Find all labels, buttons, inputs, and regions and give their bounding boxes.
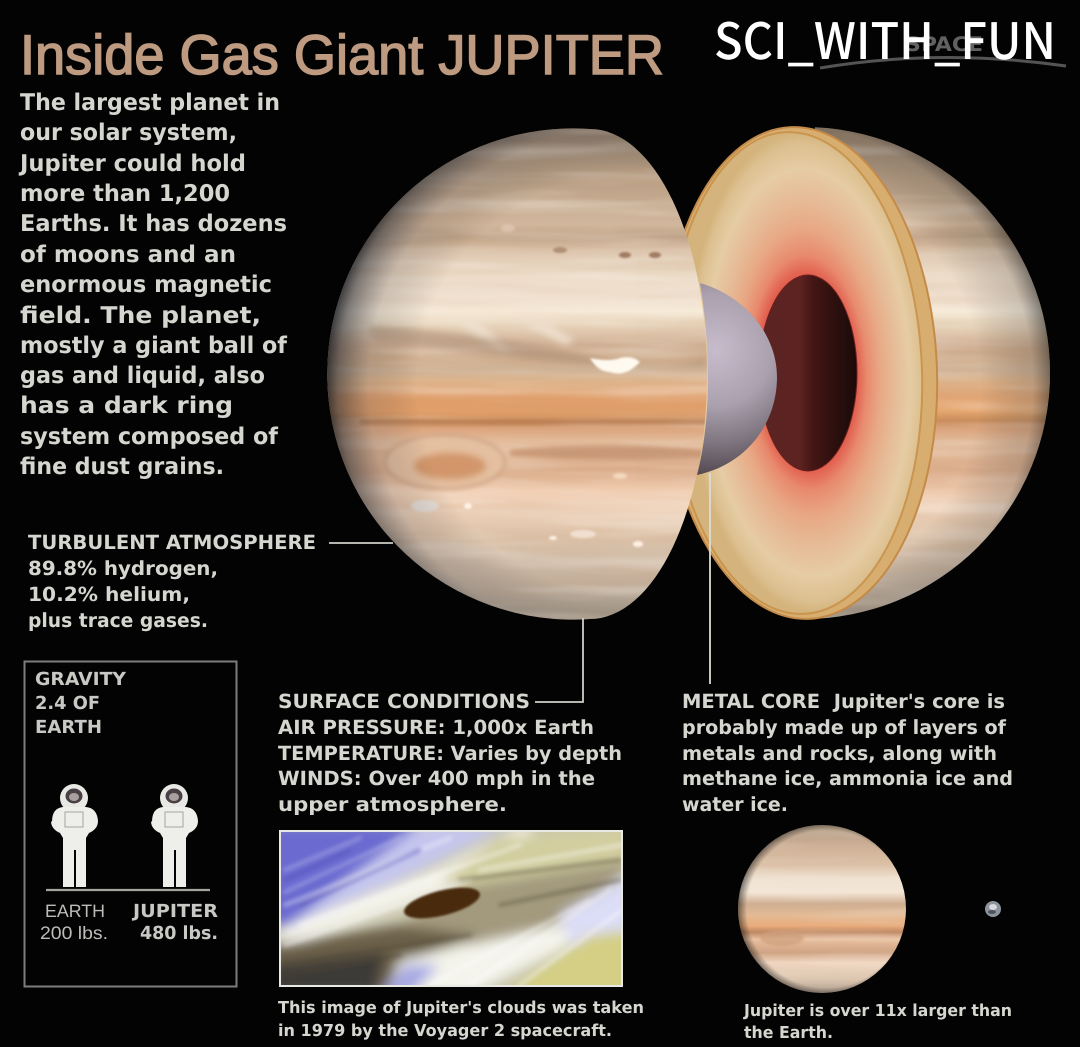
intro text block: Jupiter could hold xyxy=(18,151,246,177)
faint logo behind watermark xyxy=(820,32,1066,68)
mantle layer xyxy=(660,128,930,618)
atmosphere label xyxy=(28,531,316,632)
intro text block: mostly a giant ball of xyxy=(20,333,288,359)
intro text block: more than 1,200 xyxy=(20,181,230,207)
surface conditions text xyxy=(278,690,622,816)
metal core sphere xyxy=(697,283,777,475)
surface conditions text: upper atmosphere. xyxy=(278,793,507,816)
intro text block: gas and liquid, also xyxy=(20,363,265,389)
title: Inside Gas Giant JUPITER xyxy=(20,23,664,86)
icon: astronaut on Earth xyxy=(51,784,98,887)
watermark: SCI_WITH_FUN xyxy=(714,2,1056,74)
Jupiter weight: JUPITER xyxy=(131,901,218,922)
dark inner cavity xyxy=(759,275,857,471)
leader: metal core xyxy=(709,473,711,684)
metal core text: probably made up of layers of xyxy=(682,716,1006,739)
faint logo behind watermark: SPACE xyxy=(905,32,983,56)
small Jupiter for scale xyxy=(738,825,908,993)
left hemisphere of Jupiter xyxy=(320,125,715,625)
right half of Jupiter: back shell xyxy=(815,125,1055,625)
leader: atmosphere xyxy=(329,542,393,544)
dark spot in clouds xyxy=(401,881,483,925)
intro text block: our solar system, xyxy=(20,120,237,146)
atmosphere label: 89.8% hydrogen, xyxy=(28,557,218,580)
Earth weight: EARTH xyxy=(45,901,105,921)
intro text block: enormous magnetic xyxy=(20,272,272,298)
photo caption: in 1979 by the Voyager 2 spacecraft. xyxy=(278,1021,612,1040)
gravity heading: 2.4 OF xyxy=(35,693,100,714)
diagonal cloud streaks xyxy=(285,838,622,985)
Voyager 2 cloud photo xyxy=(279,830,623,987)
Earth weight xyxy=(40,901,108,943)
intro text block: of moons and an xyxy=(20,242,236,268)
intro text block: The largest planet in xyxy=(20,90,280,116)
cut-away cross section xyxy=(654,122,946,624)
gravity panel xyxy=(24,662,236,986)
intro text block: fine dust grains. xyxy=(20,454,224,480)
leader: surface conditions xyxy=(535,618,583,702)
gravity heading: GRAVITY xyxy=(35,669,127,690)
metal core text: metals and rocks, along with xyxy=(682,742,997,765)
metal core text: METAL CORE Jupiter's core is xyxy=(682,690,1005,713)
Earth weight: 200 lbs. xyxy=(40,923,108,943)
Jupiter weight xyxy=(131,901,218,944)
atmosphere label: plus trace gases. xyxy=(28,609,208,632)
great red spot xyxy=(385,435,505,489)
metal core text: methane ice, ammonia ice and xyxy=(682,767,1013,790)
small Earth for scale xyxy=(985,901,1001,917)
atmosphere label: TURBULENT ATMOSPHERE xyxy=(28,531,316,554)
photo caption: This image of Jupiter's clouds was taken xyxy=(278,998,644,1017)
size comparison caption: Jupiter is over 11x larger than xyxy=(743,1001,1012,1020)
surface conditions text: SURFACE CONDITIONS xyxy=(278,690,530,713)
size comparison caption: the Earth. xyxy=(744,1023,833,1042)
surface conditions text: WINDS: Over 400 mph in the xyxy=(278,767,595,790)
intro text block: has a dark ring xyxy=(20,393,233,419)
white oval cloud xyxy=(590,357,640,374)
small storm spots xyxy=(411,224,661,547)
surface conditions text: TEMPERATURE: Varies by depth xyxy=(278,742,622,765)
photo caption xyxy=(278,998,644,1040)
metal core text: water ice. xyxy=(682,793,788,816)
intro text block: system composed of xyxy=(20,424,279,450)
Jupiter weight: 480 lbs. xyxy=(140,923,218,944)
gravity heading xyxy=(35,669,127,738)
gravity heading: EARTH xyxy=(35,717,102,738)
atmosphere label: 10.2% helium, xyxy=(28,583,190,606)
metal core text xyxy=(682,690,1013,816)
size comparison caption xyxy=(743,1001,1012,1042)
cloud turbulence belt xyxy=(370,318,705,366)
intro text block xyxy=(18,90,288,480)
outer rim xyxy=(654,122,946,624)
surface conditions text: AIR PRESSURE: 1,000x Earth xyxy=(278,716,594,739)
intro text block: Earths. It has dozens xyxy=(20,211,287,237)
intro text block: field. The planet, xyxy=(20,303,261,329)
icon: astronaut on Jupiter xyxy=(151,784,198,887)
orange equatorial belt xyxy=(340,395,710,460)
